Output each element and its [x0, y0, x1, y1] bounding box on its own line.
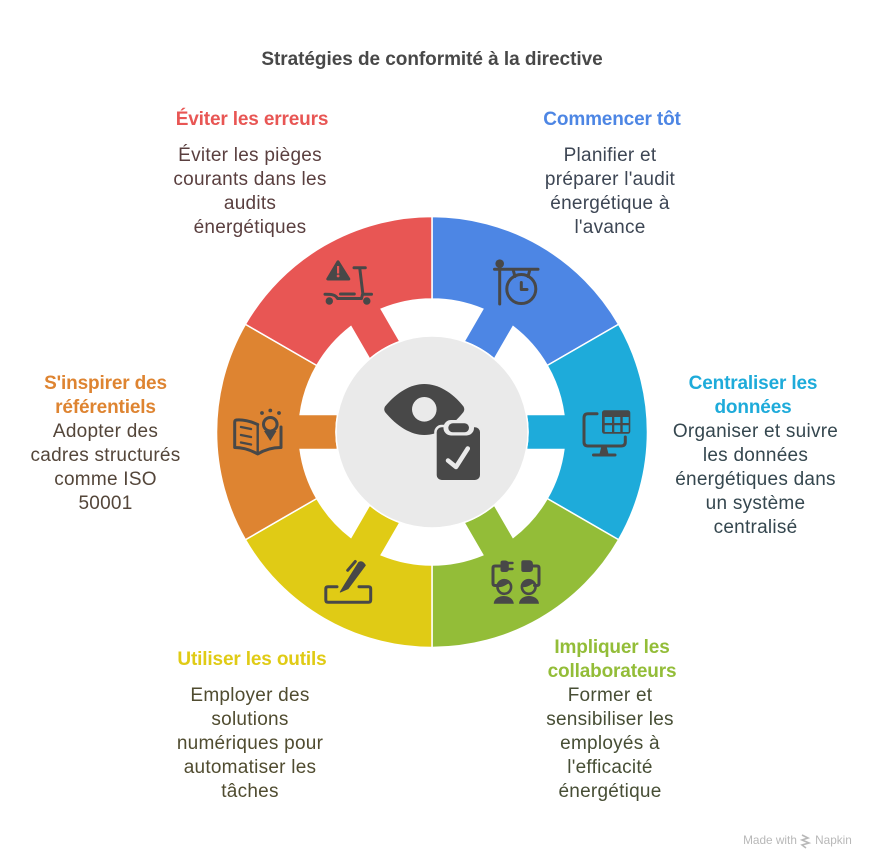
label: utiliser les outils: automatiser les [184, 757, 316, 778]
label: commencer tôt: Commencer tôt [543, 109, 682, 130]
label: commencer tôt: préparer l'audit [545, 169, 676, 190]
icon: eye and clipboard [384, 384, 480, 480]
label: s'inspirer des référentiels: référentiels [55, 397, 156, 418]
icon: pen and tray [326, 562, 371, 602]
segment: éviter [245, 163, 468, 399]
icon: open book with pin [235, 409, 281, 454]
label: impliquer les collaborateurs: collaborateurs [548, 661, 676, 682]
label: s'inspirer des référentiels: 50001 [78, 493, 133, 514]
label: éviter les erreurs: Éviter les erreurs [176, 108, 328, 130]
label: centraliser les données: Centraliser les [689, 373, 817, 394]
label: éviter les erreurs: audits [224, 193, 276, 214]
label: s'inspirer des référentiels: S'inspirer des [44, 373, 167, 394]
label: centraliser les données: données [714, 397, 792, 418]
icon: hanging clock sign [494, 259, 538, 304]
label: s'inspirer des référentiels: cadres structurés [31, 445, 180, 466]
label: s'inspirer des référentiels: Adopter des [53, 421, 158, 442]
label: commencer tôt: énergétique à [550, 193, 670, 214]
segment: impliquer [396, 465, 619, 701]
label: centraliser les données: centralisé [714, 517, 797, 538]
footer: made with napkin: Made with [743, 833, 797, 847]
label: centraliser les données: les données [703, 445, 808, 466]
label: impliquer les collaborateurs: énergétique [558, 781, 662, 802]
icon: monitor with grid [584, 410, 630, 455]
label: impliquer les collaborateurs: employés à [560, 733, 660, 754]
label: centraliser les données [673, 373, 838, 538]
label: impliquer les collaborateurs: l'efficacité [567, 757, 653, 778]
label: impliquer les collaborateurs [546, 637, 676, 802]
label: s'inspirer des référentiels [31, 373, 180, 514]
segment: s'inspirer [152, 304, 374, 540]
label: impliquer les collaborateurs: Former et [568, 685, 653, 706]
label: commencer tôt: l'avance [574, 217, 646, 238]
label: impliquer les collaborateurs: sensibiliser les [546, 709, 674, 730]
segment: commencer tôt [432, 216, 619, 366]
title: Stratégies de conformité à la directive [261, 49, 603, 70]
label: centraliser les données: un système [706, 493, 805, 514]
footer: made with napkin [743, 833, 852, 848]
ring chart [152, 163, 712, 701]
label: éviter les erreurs: énergétiques [194, 217, 306, 238]
label: utiliser les outils: Employer des [190, 685, 310, 706]
label: utiliser les outils: Utiliser les outils [177, 649, 327, 670]
label: s'inspirer des référentiels: comme ISO [54, 469, 157, 490]
label: commencer tôt: Planifier et [564, 145, 657, 166]
segment: centraliser [490, 324, 712, 560]
icon: plugs and people [493, 560, 539, 604]
label: éviter les erreurs: Éviter les pièges [178, 145, 322, 166]
label: centraliser les données: Organiser et suivre [673, 421, 838, 442]
center circle [336, 336, 528, 528]
label: impliquer les collaborateurs: Impliquer les [554, 637, 670, 658]
label: éviter les erreurs [173, 108, 328, 238]
segment: utiliser [245, 498, 432, 648]
label: utiliser les outils: numériques pour [177, 733, 324, 754]
footer: made with napkin: Napkin [815, 833, 852, 847]
label: utiliser les outils [177, 649, 327, 802]
label: centraliser les données: énergétiques dans [675, 469, 836, 490]
label: utiliser les outils: tâches [221, 781, 279, 802]
label: utiliser les outils: solutions [211, 709, 289, 730]
icon: warning and scooter [325, 262, 372, 305]
label: éviter les erreurs: courants dans les [173, 169, 327, 190]
label: commencer tôt [543, 109, 682, 238]
